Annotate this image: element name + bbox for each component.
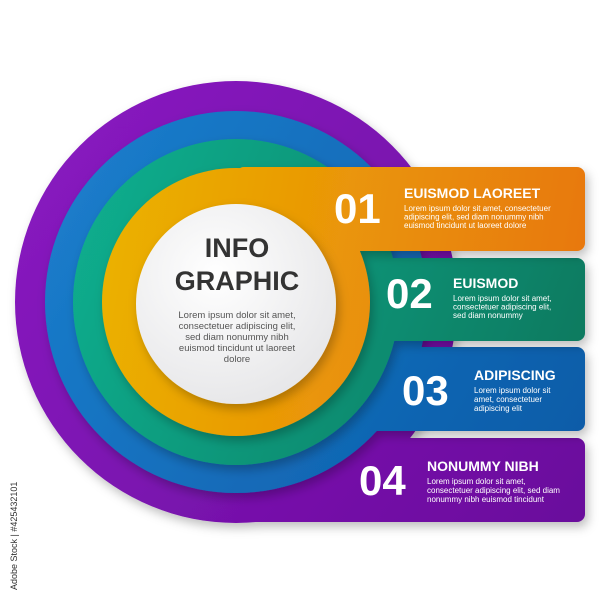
- item 04: NONUMMY NIBH: [427, 458, 539, 474]
- center title: INFO: [205, 233, 269, 263]
- item 04: nonummy nibh euismod tincidunt: [427, 495, 545, 504]
- item 02: [386, 270, 552, 320]
- item 01: EUISMOD LAOREET: [404, 185, 541, 201]
- watermark id: Adobe Stock | #425432101: [9, 482, 19, 590]
- blue layer: [45, 111, 585, 493]
- item 01: [334, 185, 551, 232]
- item 02: Lorem ipsum dolor sit amet,: [453, 294, 552, 303]
- center white circle: [136, 204, 336, 404]
- item 02: sed diam nonummy: [453, 311, 523, 320]
- center body text: consectetuer adipiscing elit,: [179, 321, 295, 332]
- item 03: ADIPISCING: [474, 367, 556, 383]
- center body text: euismod tincidunt ut laoreet: [179, 343, 295, 354]
- item 02: consectetuer adipiscing elit,: [453, 302, 551, 312]
- center body text: sed diam nonummy nibh: [185, 332, 289, 343]
- green layer: [73, 139, 585, 465]
- orange layer: [102, 167, 585, 436]
- item 03: 03: [402, 367, 449, 414]
- center title: [175, 233, 299, 296]
- item 03: adipiscing elit: [474, 404, 523, 413]
- item 04: consectetuer adipiscing elit, sed diam: [427, 486, 560, 495]
- item 01: euismod tincidunt ut laoreet dolore: [404, 221, 527, 230]
- item 03: amet, consectetuer: [474, 395, 542, 404]
- item 02: EUISMOD: [453, 275, 518, 291]
- center body text: [178, 310, 296, 365]
- item 03: [402, 367, 556, 414]
- item 04: Lorem ipsum dolor sit amet,: [427, 477, 526, 486]
- center title: GRAPHIC: [175, 266, 299, 296]
- item 01: 01: [334, 185, 381, 232]
- item 04: [359, 457, 560, 504]
- item 01: adipiscing elit, sed diam nonummy nibh: [404, 212, 544, 222]
- item 01: Lorem ipsum dolor sit amet, consectetuer: [404, 204, 551, 213]
- item 02: 02: [386, 270, 433, 317]
- item 04: 04: [359, 457, 406, 504]
- item 03: Lorem ipsum dolor sit: [474, 386, 551, 395]
- center body text: Lorem ipsum dolor sit amet,: [178, 310, 296, 321]
- purple layer: [15, 81, 585, 523]
- center body text: dolore: [224, 354, 250, 365]
